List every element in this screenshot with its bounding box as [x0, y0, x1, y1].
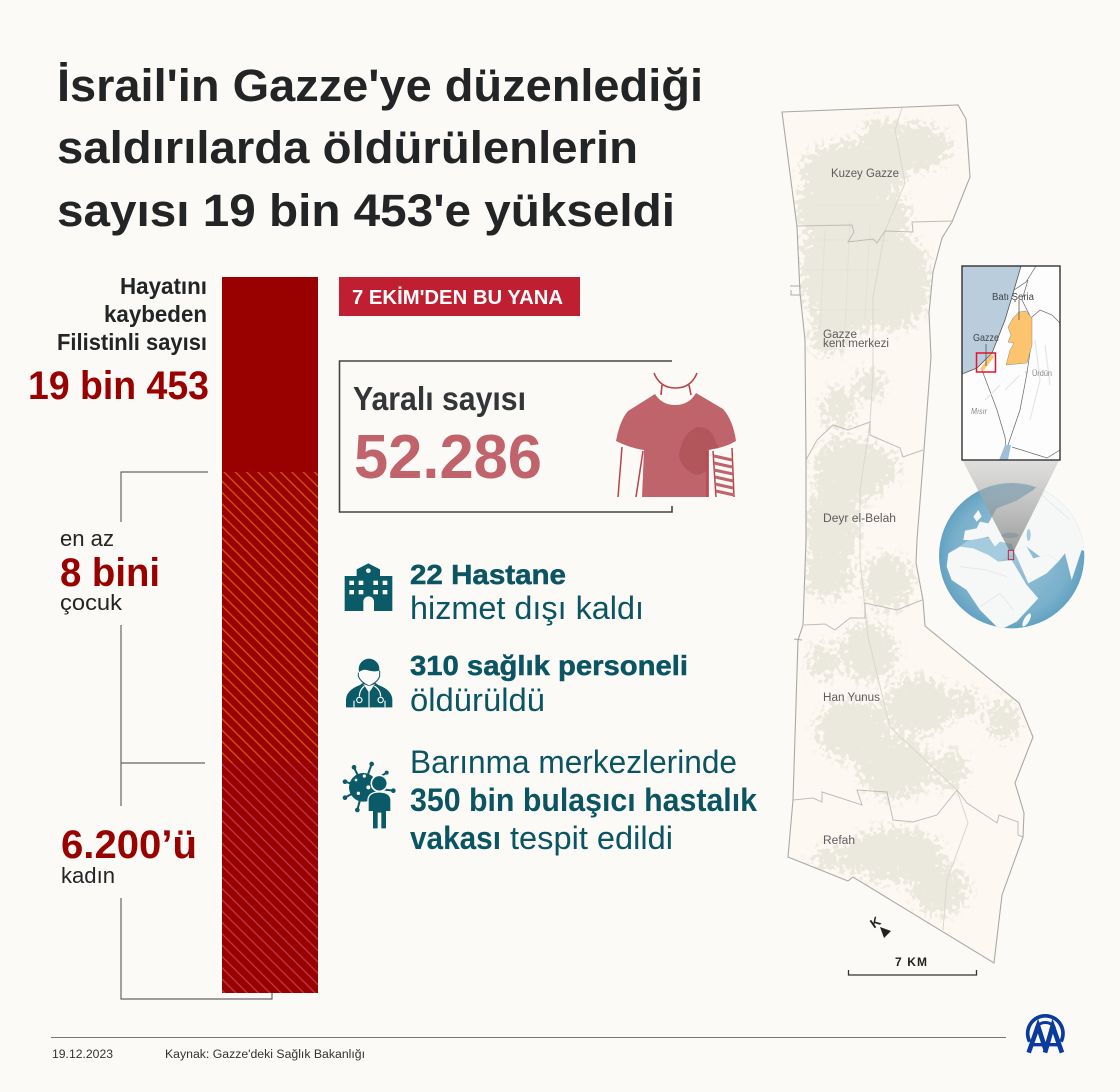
label: total killed: Hayatını	[120, 273, 207, 299]
footer	[51, 1038, 1006, 1061]
text: health workers: 310 sağlık personeli	[410, 650, 688, 681]
panel: wounded: 52.286	[354, 423, 542, 492]
label: total killed: Filistinli sayısı	[57, 329, 207, 355]
footer: Kaynak: Gazze'deki Sağlık Bakanlığı	[165, 1049, 365, 1061]
logo: AA	[1028, 1016, 1063, 1053]
bracket lines	[121, 472, 272, 999]
panel: wounded	[340, 361, 736, 512]
text: health workers	[410, 650, 688, 718]
label: children: 8 bini	[60, 551, 160, 595]
title	[57, 60, 703, 236]
text: infectious disease: 350 bin bulaşıcı hastalık	[410, 782, 757, 818]
map labels: kent merkezi	[823, 338, 889, 350]
north arrow	[867, 913, 891, 938]
panel: wounded: Yaralı sayısı	[353, 380, 526, 417]
label: children: en az	[60, 526, 114, 551]
text: infectious disease: vakası	[410, 820, 501, 856]
inset map: Ürdün	[1032, 369, 1052, 378]
north arrow: K	[867, 913, 884, 931]
icon: hospital	[345, 563, 392, 611]
scale bar	[848, 955, 976, 975]
text: infectious disease: Barınma merkezlerinde	[410, 744, 737, 780]
map labels	[823, 168, 899, 847]
map: Gaza Strip	[780, 100, 1035, 970]
inset map	[962, 266, 1060, 460]
label: women: kadın	[61, 863, 115, 888]
globe	[939, 460, 1090, 630]
text: infectious disease	[410, 744, 757, 856]
title: İsrail'in Gazze'ye düzenlediği	[57, 60, 703, 111]
label: women: 6.200’ü	[61, 823, 197, 867]
text: hospitals	[410, 559, 644, 626]
inset map: Batı Şeria	[992, 292, 1034, 303]
footer: 19.12.2023	[52, 1049, 113, 1061]
icon: doctor	[346, 659, 392, 707]
date badge: 7 EKİM'DEN BU YANA	[352, 286, 563, 309]
inset map: Mısır	[971, 407, 987, 416]
icon: virus and person	[344, 763, 395, 829]
label: children	[60, 526, 160, 615]
map labels: Deyr el-Belah	[823, 513, 896, 525]
map labels: Gazze	[823, 329, 857, 341]
inset map: Gazze	[973, 332, 999, 344]
text: hospitals: 22 Hastane	[410, 559, 566, 590]
title: saldırılarda öldürülenlerin	[57, 122, 638, 173]
label: children: çocuk	[60, 590, 123, 615]
map labels: Han Yunus	[823, 692, 880, 704]
district boundaries	[793, 221, 1023, 837]
text: health workers: öldürüldü	[410, 682, 545, 718]
text: hospitals: hizmet dışı kaldı	[410, 590, 644, 626]
date badge	[339, 277, 580, 316]
label: total killed: kaybeden	[104, 301, 207, 327]
label: women	[61, 823, 197, 888]
title: sayısı 19 bin 453'e yükseldi	[57, 185, 675, 236]
scale bar: 7 KM	[895, 955, 927, 969]
map labels: Refah	[823, 835, 855, 847]
text: infectious disease: tespit edildi	[510, 820, 673, 856]
map labels: Kuzey Gazze	[831, 168, 899, 180]
stacked bar: total deaths	[222, 277, 318, 993]
label: total killed	[28, 273, 209, 408]
icon: wounded person	[616, 373, 736, 497]
label: total killed: 19 bin 453	[28, 364, 209, 408]
cone	[962, 460, 1059, 551]
